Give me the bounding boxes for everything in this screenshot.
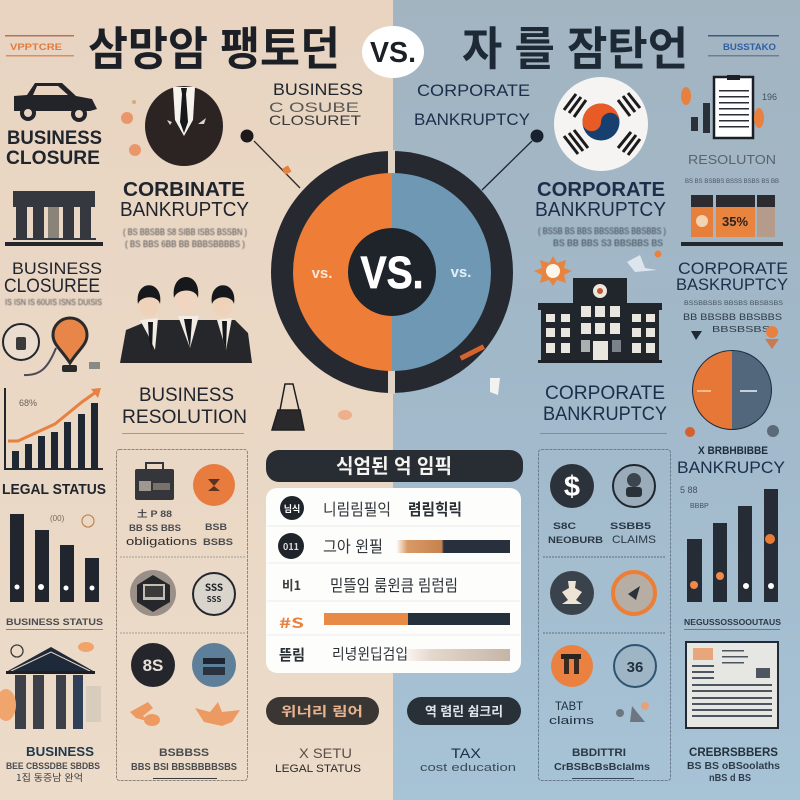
chart: right bars with dots: BBBP (690, 503, 709, 510)
text block: lower left: 1집 동증남 완억 (16, 770, 83, 784)
heading: business resolution: BUSINESS (139, 385, 234, 406)
heading: business closuree (4, 259, 102, 297)
text block: lower right box (554, 747, 650, 779)
text block: lower right: CREBRSBBERS (689, 745, 778, 759)
tag: top right: BUSSTAKO (723, 42, 776, 52)
caption: right small lines: BB BBSBB BBSBBS (683, 312, 782, 322)
row 5 with faded bar (279, 643, 510, 665)
text block: lower left box: BBS BSI BBSBBBBSBS (131, 762, 237, 773)
caption: right status: NEGUSSOSSOOUTAUS (684, 617, 781, 627)
heading: corporate bankruptcy lower right: CORPORATE (545, 383, 665, 404)
decoration: orange leaves (130, 702, 240, 726)
caption: right centre small text (538, 226, 666, 248)
connector: right pointer (482, 130, 544, 190)
icon: dollar circle (550, 464, 594, 508)
decoration: tiny right sketch (616, 702, 649, 722)
icon: text circle (193, 573, 235, 615)
table panel (266, 488, 521, 673)
icon: dark figure circle (550, 571, 594, 615)
heading: corbinate bankruptcy: BANKRUPTCY (120, 199, 249, 221)
caption: business status: BUSINESS STATUS (6, 617, 103, 627)
heading: corporate baskruptcy: CORPORATE (678, 259, 788, 278)
heading: corbinate bankruptcy: CORBINATE (123, 179, 245, 201)
text block: lower left: BUSINESS (26, 744, 94, 759)
icon: briefcase (135, 463, 174, 500)
chart: left bars with white dots: (00) (50, 514, 65, 523)
row 5 with faded bar: 리녕윈딥검입 (332, 643, 408, 664)
icon: right small orange marker (691, 326, 779, 349)
text block: tax claims (549, 699, 595, 727)
caption: left centre small text (123, 227, 247, 249)
text block: right box row (548, 521, 656, 546)
chart: rising bars with orange arrow (4, 388, 103, 470)
row 1: 렴림힉릭 (408, 496, 462, 520)
icon: suit figure (145, 86, 223, 166)
text block: lower left: BEE CBSSDBE SBDBS (6, 761, 100, 772)
heading: business closuree: CLOSUREE (4, 276, 100, 297)
caption: tiny right line: BS BS BSBBS BSSS BSBS BS BB (685, 179, 779, 185)
icon: blue ring circle (614, 645, 656, 687)
caption: tax cost education: TAX (451, 745, 482, 761)
panel: left dashed comparison box (116, 450, 248, 780)
row 2 with bar: 그아 윈필 (323, 533, 383, 557)
text block: obligations: BB SS BBS (129, 523, 181, 533)
chart: rising bars with orange arrow: 68% (19, 398, 37, 408)
chart: half orange half slate pie (685, 350, 779, 437)
icon: text circle: SSS (205, 579, 223, 594)
pill: right: 역 렴린 쉼크리 (425, 701, 503, 720)
row 1 (280, 496, 462, 520)
chart: central VS donut: VS. (360, 247, 424, 298)
building: corporate headquarters (538, 278, 662, 363)
chart: left bars with white dots (10, 514, 99, 602)
decoration: orange accents near suit (121, 100, 141, 156)
heading: business closuree: BUSINESS (12, 259, 102, 278)
row 5 with faded bar: 뜯림 (279, 644, 305, 665)
heading: business closure centre top: C OSUBE (269, 99, 359, 115)
icon: three businessmen (120, 277, 252, 363)
heading: corporate baskruptcy (676, 259, 788, 294)
caption: tax cost education: cost education (420, 762, 516, 774)
text block: lower left box: BSBBSS (159, 747, 209, 759)
text block: obligations: BSBS (203, 537, 233, 547)
caption: left centre small text: ( BS BBSBB S8 SIBB ISBS BSSBN ) (123, 227, 247, 237)
caption: right small lines: BSSBBSBS BBSBS BBSBSBS (684, 301, 783, 307)
heading: business closure (6, 128, 102, 169)
text block: obligations (126, 508, 233, 548)
heading: corporate bankruptcy lower right: BANKRUPTCY (543, 404, 667, 425)
caption: right small lines: BBSBSBS (712, 325, 770, 334)
icon: blue circle (192, 643, 236, 687)
row 1: 님식 (284, 502, 300, 515)
icon: handbag (272, 384, 304, 430)
title: right Korean heading: 자 를 잠탄언 (462, 13, 688, 79)
text block: obligations: 土 P 88 (137, 508, 172, 519)
row 3: 비1 (282, 575, 301, 594)
heading: bankruptcy right (677, 445, 785, 477)
text block: lower right: BS BS oBSoolaths (687, 761, 780, 772)
icon: dollar circle: $ (564, 471, 580, 503)
text block: right box row: S8C (553, 521, 577, 531)
icon: blue ring circle: 36 (627, 659, 643, 676)
title: left Korean heading: 삼망암 팽토던 (88, 13, 340, 79)
row 1: 니림림필익 (323, 496, 391, 520)
text block: lower right box: BBDITTRI (572, 747, 626, 759)
heading: business closure centre top (269, 80, 363, 128)
heading: corbinate bankruptcy (120, 179, 249, 221)
text block: right box row: CLAIMS (612, 534, 656, 546)
icon: figure circle (613, 465, 655, 507)
decoration: pale icon near bag right (490, 378, 500, 395)
heading: corporate bankruptcy centre top: BANKRUPTCY (414, 110, 530, 129)
icon: dark circle: 8S (143, 656, 163, 675)
pill: right (407, 697, 521, 725)
heading: corporate bankruptcy right (535, 179, 666, 221)
caption: legal status centre bottom: LEGAL STATUS (275, 763, 361, 775)
text block: tax claims: TABT (555, 699, 584, 713)
icon: orange storefront with percent: 35% (722, 214, 748, 229)
text block: obligations: BSB (205, 522, 228, 532)
caption: legal status centre bottom (275, 745, 361, 775)
icon: clipboard document: 196 (762, 92, 777, 102)
text block: lower right (687, 745, 780, 784)
caption: tax cost education (420, 745, 516, 774)
panel: left background (0, 0, 393, 800)
chart: central VS donut: vs. (451, 264, 471, 281)
caption: right small lines (683, 301, 783, 334)
row 3 (282, 572, 458, 596)
text block: tax claims: claims (549, 715, 595, 727)
caption: resolution: RESOLUTON (688, 152, 776, 167)
text block: right box row: SSBB5 (610, 521, 651, 531)
heading: business closure centre top: CLOSURET (269, 112, 362, 128)
heading: bankruptcy right: X BRBHBIBBE (698, 445, 768, 457)
heading: corporate baskruptcy: BASKRUPTCY (676, 275, 788, 294)
text block: lower right box: CrBSBcBsBcIaIms (554, 762, 650, 773)
heading: business resolution (122, 385, 247, 434)
icon: orange sun (534, 256, 572, 286)
icon: orange tax circle (551, 645, 593, 687)
heading: business closure: CLOSURE (6, 148, 100, 169)
badge: VS bubble: VS. (370, 37, 416, 69)
text block: lower left (6, 744, 100, 784)
caption: left centre small text: ( BS BBS 6BB BB BBBSBBBBS ) (125, 239, 245, 249)
icon: text circle: SSS (207, 594, 221, 605)
caption: right centre small text: BS BB BBS S3 BBSBBS BS (553, 238, 663, 248)
icon: orange storefront with percent (681, 195, 783, 246)
chart: central VS donut (271, 150, 513, 394)
chart: right bars with dots (680, 485, 778, 602)
heading: corporate bankruptcy right: BANKRUPTCY (535, 199, 666, 221)
icon: clock and orange map pin (3, 318, 100, 375)
heading: bankruptcy right: BANKRUPCY (677, 458, 785, 477)
caption: right centre small text: ( BSSB BS BBS BBSSBBS BBSBBS ) (538, 226, 666, 236)
icon: dark circle (131, 643, 175, 687)
icon: clipboard document (681, 75, 777, 138)
text block: right box row: NEOBURB (548, 535, 604, 545)
icon: temple building (5, 191, 103, 246)
panel: right background (393, 0, 800, 800)
heading: corporate bankruptcy right: CORPORATE (537, 179, 665, 201)
heading: business closure centre top: BUSINESS (273, 80, 363, 99)
chart: right bars with dots: 5 88 (680, 485, 698, 495)
icon: right document (686, 642, 778, 728)
text block: obligations: obligations (126, 536, 198, 548)
text block: lower right: nBS d BS (709, 773, 751, 784)
decoration: orange accent near handbag (338, 410, 352, 420)
row 3: 믿뜰임 룸윈큼 림럼림 (330, 572, 458, 596)
icon: car (14, 83, 97, 122)
icon: laptop circle (130, 570, 176, 616)
tag: top right (708, 35, 779, 56)
caption: business status (6, 617, 103, 630)
tag: top left (5, 35, 74, 56)
table heading pill (266, 450, 523, 482)
caption: left small text: IS ISN IS 60UIS ISNS DUISIS (5, 298, 102, 307)
row 2 with bar (278, 533, 510, 559)
panel: right dashed comparison box (538, 450, 670, 780)
caption: legal status centre bottom: X SETU (299, 745, 352, 761)
row 4 with bar (279, 613, 510, 633)
text block: lower left box (131, 747, 237, 779)
chart: central VS donut: vs. (312, 265, 332, 282)
badge: VS bubble (362, 26, 424, 78)
heading: corporate bankruptcy centre top: CORPORATE (417, 81, 530, 100)
heading: legal status: LEGAL STATUS (2, 481, 106, 498)
icon: pillars temple (0, 642, 101, 729)
icon: Korean flag (554, 77, 648, 171)
pill: left (266, 697, 379, 725)
connector: left pointer (240, 130, 300, 188)
table heading pill: 식엄된 억 임픽 (336, 450, 452, 479)
row 2 with bar: 011 (283, 540, 299, 553)
heading: corporate bankruptcy centre top (414, 81, 530, 129)
heading: corporate bankruptcy lower right (540, 383, 667, 434)
icon: orange ring circle (613, 572, 655, 614)
heading: business resolution: RESOLUTION (122, 407, 247, 428)
row 4 with bar: #S (279, 613, 304, 633)
tag: top left: VPPTCRE (10, 42, 62, 52)
pill: left: 위너리 림어 (281, 701, 363, 720)
decoration: top accent above building (627, 250, 662, 272)
icon: orange circle (193, 464, 235, 506)
heading: business closure: BUSINESS (7, 128, 102, 149)
